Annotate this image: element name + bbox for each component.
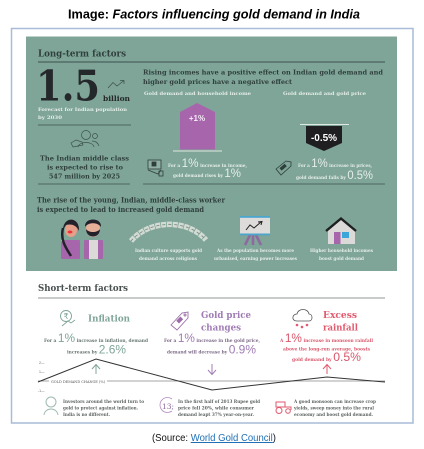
text: rupee gold: In the first half of 2013 Rupee gold — [178, 400, 260, 405]
big number: population — [36, 62, 131, 121]
text: gold price effect — [164, 331, 260, 356]
text: middle class: is expected to rise to — [47, 164, 124, 172]
panel: short-term factors — [38, 284, 385, 418]
chart: gold demand change: -1— — [38, 389, 45, 393]
icon: price tag — [276, 161, 291, 175]
heading: excess rainfall — [323, 310, 358, 334]
subheading: income: Gold demand and household income — [144, 91, 251, 97]
heading: young worker: is expected to lead to increased gold demand — [37, 205, 204, 214]
heading: gold price changes: changes — [201, 322, 241, 334]
text: household incomes — [310, 248, 373, 262]
text: gold price effect: demand will decrease by 0.9% — [167, 342, 256, 356]
heading: gold price changes: Gold price — [201, 310, 251, 321]
icon: presentation chart — [240, 216, 270, 245]
text: culture: demand across religions — [139, 256, 197, 262]
icon: young couple — [61, 220, 103, 259]
text: investors — [63, 400, 144, 418]
icon: 2013 date: 13; — [162, 402, 174, 411]
text: culture — [135, 248, 203, 262]
text: middle class: The Indian middle class — [40, 154, 129, 162]
chart: gold demand change: 1— — [39, 370, 45, 374]
text: urbanised: urbanised, earning power increases — [214, 256, 297, 262]
text: rainfall effect — [279, 331, 373, 364]
text: monsoon: yields, sweep money into the rural — [293, 406, 374, 412]
heading: excess rainfall: Excess — [323, 310, 357, 321]
text: income and price effects heading: Rising incomes have a positive effect on Indian gold demand and — [143, 68, 383, 76]
big number: population: Forecast for Indian population — [38, 107, 127, 113]
text: income and price effects heading: higher gold prices have a negative effect — [143, 78, 292, 86]
text: price effect: For a 1% increase in prices, — [298, 156, 372, 170]
panel: long-term factors — [26, 36, 397, 271]
heading: inflation: Inflation — [88, 314, 130, 324]
icon: inflation: ₹ — [64, 312, 69, 321]
text: rainfall effect: A 1% increase in monsoon rainfall — [279, 331, 373, 345]
icon: house — [326, 218, 356, 244]
text: gold price effect: For a 1% increase in the gold price, — [164, 331, 260, 345]
text: income and price effects heading — [143, 68, 383, 86]
text: income effect: gold demand rises by 1% — [173, 166, 241, 180]
text: urbanised: As the population becomes more — [216, 248, 294, 254]
text: rupee gold: price fell 20%, while consumer — [178, 406, 255, 412]
icon: 2013 date — [160, 398, 174, 413]
heading: long-term factors: Long-term factors — [38, 50, 126, 60]
heading: short-term factors: Short-term factors — [38, 284, 128, 294]
text: monsoon: A good monsoon can increase crop — [293, 400, 376, 405]
big number: population: 1.5 — [36, 62, 100, 110]
heading: gold price changes — [201, 310, 251, 334]
chart: +1% income bar: +1% — [189, 114, 205, 123]
source caption: (Source: World Gold Council) — [152, 433, 276, 444]
text: rupee gold — [178, 400, 260, 418]
chart: gold demand change: GOLD DEMAND CHANGE (%) — [51, 380, 106, 384]
chart: -0.5% price bar: -0.5% — [311, 133, 337, 144]
text: culture: Indian culture supports gold — [135, 248, 203, 254]
text: monsoon: economy and boost gold demand. — [294, 413, 373, 418]
text: income effect — [168, 156, 247, 180]
icon: middle class people — [71, 130, 99, 147]
icon: tractor — [276, 402, 291, 414]
chart: gold demand change — [38, 359, 385, 393]
text: household incomes: Higher household incomes — [310, 248, 373, 254]
text: rainfall effect: above the long-run average, boosts — [283, 348, 371, 352]
icon: money — [148, 160, 163, 176]
big number: population: by 2030 — [38, 115, 63, 121]
text: middle class: 547 million by 2025 — [49, 172, 120, 180]
big number: population: billion — [103, 94, 131, 103]
icon: rain cloud — [293, 310, 312, 328]
text: rupee gold: demand leapt 37% year-on-year. — [178, 413, 254, 418]
text: household incomes: boost gold demand — [319, 256, 365, 262]
icon: inflation — [60, 310, 75, 326]
text: urbanised — [214, 248, 297, 262]
heading: excess rainfall: rainfall — [323, 322, 358, 334]
chart: +1% income bar — [173, 103, 222, 151]
text: investors: India is no different. — [63, 413, 110, 418]
heading: young worker — [37, 196, 225, 214]
icon: investor — [44, 397, 58, 415]
text: rainfall effect: gold demand by 0.5% — [292, 350, 361, 364]
text: inflation effect: increases by 2.6% — [67, 342, 126, 356]
chart: -0.5% price bar — [300, 124, 349, 151]
text: inflation effect — [44, 331, 148, 356]
text: investors: gold to protect against inflation. — [63, 406, 138, 412]
chart: gold demand change: 2— — [39, 361, 45, 365]
heading: young worker: The rise of the young, Indian, middle-class worker — [37, 196, 225, 204]
subheading: price: Gold demand and gold price — [283, 91, 366, 97]
text: monsoon — [293, 400, 376, 418]
text: middle class — [40, 154, 129, 180]
icon: gold tag — [171, 312, 188, 330]
title: Image: Factors influencing gold demand in India — [68, 6, 360, 22]
text: inflation effect: For a 1% increase in inflation, demand — [44, 331, 148, 345]
text: investors: Investors around the world turn to — [63, 400, 144, 405]
text: price effect — [296, 156, 373, 182]
text: price effect: gold demand falls by 0.5% — [296, 170, 373, 182]
text: income effect: For a 1% increase in income, — [168, 156, 247, 170]
icon: gold chain — [131, 224, 206, 241]
